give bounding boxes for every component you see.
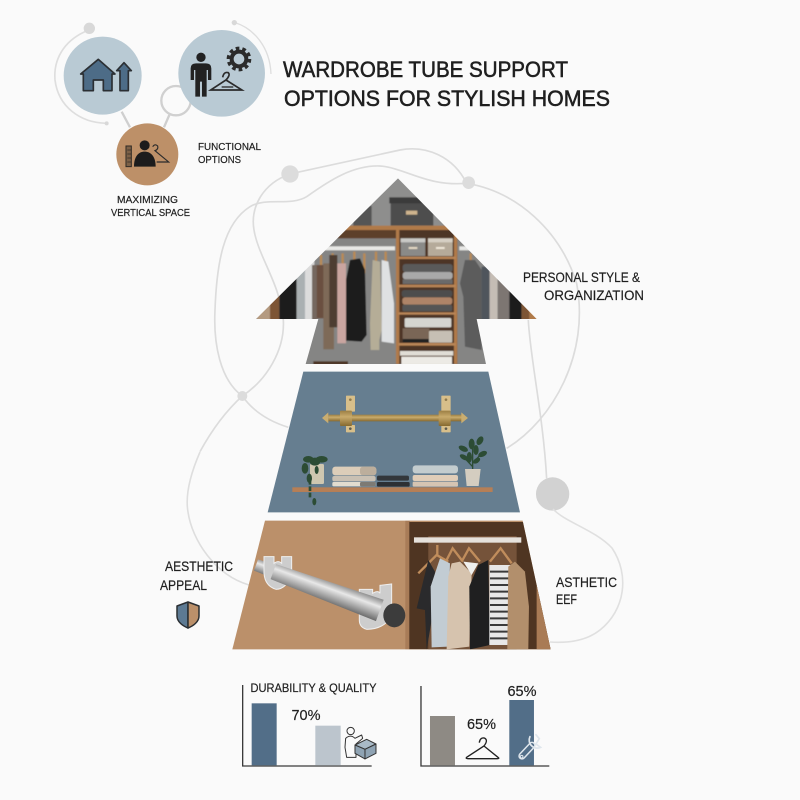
connecting curve: lower right: [550, 509, 623, 642]
chart: durability and quality: 70%: [292, 707, 320, 724]
right wing clothes: [313, 246, 539, 365]
icon: person with box: [345, 727, 376, 759]
label: aesthetic appeal: APPEAL: [160, 577, 207, 593]
icon: house and up arrow: [64, 37, 142, 115]
label: personal style and organization: PERSONAL STYLE &: [523, 269, 641, 285]
icon: shield: [177, 602, 199, 628]
wooden shelf: [292, 487, 493, 492]
label: functional options: FUNCTIONAL: [198, 141, 261, 153]
open closet: [405, 521, 557, 650]
title: OPTIONS FOR STYLISH HOMES: [284, 86, 610, 111]
panel: closet arrow tier: [256, 178, 536, 364]
label: aesthetic appeal: AESTHETIC: [165, 558, 233, 574]
garments: [417, 560, 435, 650]
connecting curves: [200, 149, 579, 511]
chart: hanger and maintenance: [421, 683, 549, 766]
label: functional options: OPTIONS: [198, 154, 241, 166]
orbit arcs and connectors: [55, 20, 271, 127]
chart: hanger and maintenance: 65%: [508, 683, 536, 700]
label: maximizing vertical space: [111, 194, 190, 219]
label: asthetic eef: ASTHETIC: [556, 574, 617, 590]
chart: hanger and maintenance: 65%: [467, 716, 496, 733]
shelving unit: [396, 230, 457, 365]
top icon cluster: [55, 20, 271, 185]
steel tube support: [253, 557, 405, 629]
top storage boxes: [352, 180, 444, 226]
icon: person, gear and hanger: [178, 30, 265, 117]
title: [283, 57, 610, 111]
chart: durability and quality: [243, 681, 376, 766]
left wing clothes: [257, 246, 395, 320]
icon: hanger: [466, 738, 499, 759]
label: asthetic eef: [556, 574, 617, 607]
hangers: [418, 545, 512, 573]
closet upper shelf: [337, 225, 450, 239]
title: WARDROBE TUBE SUPPORT: [283, 57, 568, 82]
label: functional options: [198, 141, 261, 166]
icon: wrench: [520, 735, 541, 758]
folded towels: [332, 465, 458, 487]
panel: brass rod tier: [268, 372, 520, 512]
hanging garments: [312, 255, 394, 350]
brass tube support: [322, 396, 468, 432]
panel: steel rod tier: [232, 521, 557, 650]
label: personal style and organization: ORGANIZATION: [544, 287, 644, 303]
chart: durability and quality: DURABILITY & QUALITY: [250, 681, 376, 695]
label: personal style and organization: [523, 269, 644, 303]
label: asthetic eef: EEF: [556, 591, 577, 607]
icon: person with ruler and hanger: [116, 123, 178, 185]
label: aesthetic appeal: [160, 558, 233, 593]
plant left: [302, 456, 328, 505]
plant right: [458, 435, 488, 486]
label: maximizing vertical space: MAXIMIZING: [117, 194, 178, 206]
label: maximizing vertical space: VERTICAL SPACE: [111, 207, 190, 219]
connecting curve: lower left: [187, 452, 249, 585]
